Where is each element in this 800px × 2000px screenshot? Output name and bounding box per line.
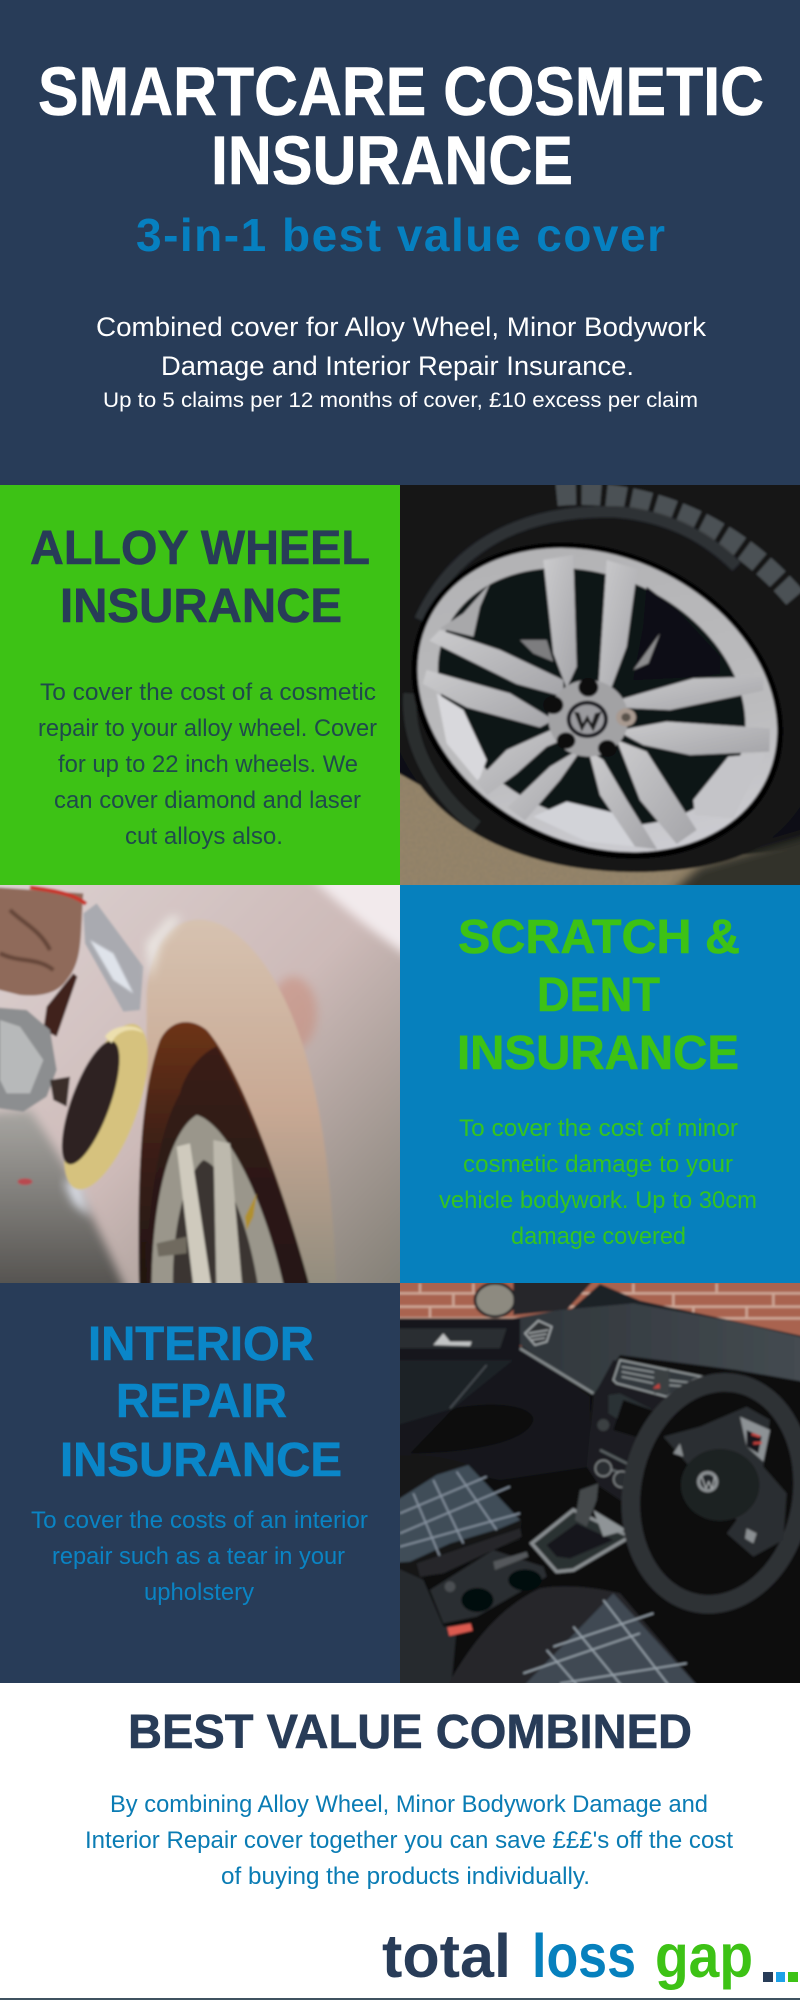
chrome strip [83, 903, 143, 1012]
intro text: Up to 5 claims per 12 months of cover, £10 excess per claim [103, 389, 698, 412]
text: alloy wheel description: repair to your alloy wheel. Cover [38, 715, 377, 742]
text: interior repair description: upholstery [144, 1579, 254, 1606]
photo: polishing bodywork [0, 885, 400, 1283]
front seat with plaid [387, 1455, 522, 1580]
text: interior repair description [31, 1507, 368, 1606]
heading: alloy wheel: INSURANCE [60, 580, 342, 633]
heading: interior repair [60, 1318, 342, 1487]
heading: interior repair: INSURANCE [60, 1434, 342, 1487]
text: combined description: of buying the products individually. [221, 1863, 590, 1890]
heading: best value combined: BEST VALUE COMBINED [128, 1706, 692, 1759]
text: alloy wheel description: for up to 22 inch wheels. We [58, 751, 358, 778]
intro text: Damage and Interior Repair Insurance. [161, 351, 634, 381]
text: combined description [85, 1791, 733, 1890]
photo: car interior [400, 1283, 800, 1683]
text: combined description: By combining Alloy Wheel, Minor Bodywork Damage and [110, 1791, 708, 1818]
door panel [387, 1318, 593, 1480]
heading: interior repair: INTERIOR [88, 1318, 314, 1371]
heading: scratch and dent: DENT [537, 969, 660, 1022]
hub and VW badge [543, 678, 636, 757]
text: alloy wheel description: can cover diamond and laser [54, 787, 361, 814]
photo: alloy wheel [400, 485, 800, 885]
lower body panel [0, 1110, 130, 1300]
text: scratch and dent description: cosmetic damage to your [463, 1151, 733, 1178]
intro text [96, 312, 707, 412]
steering wheel [614, 1369, 800, 1618]
cup holders [430, 1550, 547, 1623]
heading: scratch and dent: INSURANCE [457, 1027, 739, 1080]
logo: total loss gap: total [382, 1922, 511, 1990]
panel: best value combined [0, 1683, 800, 2000]
text: scratch and dent description: To cover the cost of minor [459, 1115, 738, 1142]
wheel arch [139, 919, 337, 1300]
polisher tool [0, 973, 165, 1199]
logo: total loss gap [382, 1922, 798, 1990]
tyre [387, 480, 800, 872]
title [38, 53, 764, 199]
text: interior repair description: To cover the costs of an interior [31, 1507, 368, 1534]
header panel [0, 0, 800, 485]
heading: alloy wheel: ALLOY WHEEL [30, 522, 370, 575]
gear shifter [532, 1483, 630, 1572]
text: scratch and dent description: vehicle bodywork. Up to 30cm [439, 1187, 757, 1214]
text: scratch and dent description [439, 1115, 757, 1250]
hand [0, 887, 86, 996]
text: combined description: Interior Repair cover together you can save £££'s off the cost [85, 1827, 733, 1854]
rear seat with plaid [387, 1563, 710, 1700]
logo: total loss gap: gap [655, 1922, 753, 1990]
title: INSURANCE [211, 122, 573, 199]
heading: interior repair: REPAIR [116, 1375, 287, 1428]
spokes [423, 555, 770, 849]
panel: interior repair insurance [0, 1283, 400, 1683]
rim [360, 484, 800, 917]
text: alloy wheel description: To cover the cost of a cosmetic [40, 679, 376, 706]
text: scratch and dent description: damage covered [511, 1223, 686, 1250]
logo: total loss gap: loss [532, 1922, 636, 1990]
dashboard [513, 1303, 800, 1395]
heading: scratch and dent: SCRATCH & [458, 911, 740, 964]
subtitle: 3-in-1 best value cover [136, 209, 665, 261]
heading: alloy wheel [30, 522, 370, 633]
text: alloy wheel description [38, 679, 377, 850]
panel: scratch and dent insurance [400, 885, 800, 1283]
heading: scratch and dent [457, 911, 740, 1080]
text: alloy wheel description: cut alloys also. [125, 823, 283, 850]
alloy wheel in arch [152, 1115, 287, 1300]
text: interior repair description: repair such as a tear in your [52, 1543, 345, 1570]
brick wall outside [387, 1267, 800, 1350]
gravel ground [387, 767, 800, 900]
centre console [587, 1360, 717, 1520]
panel: alloy wheel insurance [0, 485, 400, 885]
intro text: Combined cover for Alloy Wheel, Minor Bodywork [96, 312, 707, 342]
